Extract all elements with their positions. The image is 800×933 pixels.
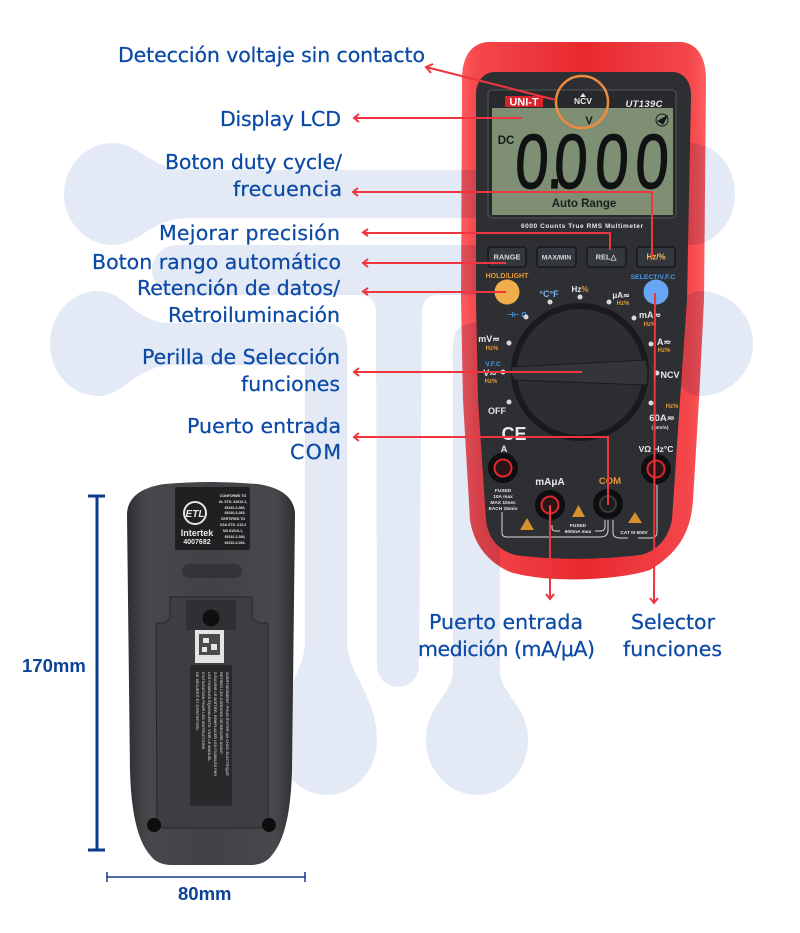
fuse notes and safety lines: CAT III 600V — [620, 530, 648, 536]
certification sticker: CSA STD. C22.2 — [220, 523, 246, 527]
label: data hold: Retroiluminación — [168, 303, 340, 327]
grip slot — [182, 564, 242, 578]
LCD auto icon — [656, 114, 668, 126]
A jack: A — [501, 444, 508, 454]
LCD DC indicator: DC — [498, 135, 514, 147]
dial scale labels: °C°F — [539, 289, 559, 299]
QR label — [195, 630, 224, 663]
dial scale labels: A≂ — [657, 337, 671, 347]
RANGE button — [488, 247, 526, 267]
label: selector knob: Perilla de Selección — [142, 345, 340, 369]
certification sticker: UL STD. 61010-1, — [219, 500, 247, 504]
label: duty cycle: frecuencia — [233, 177, 342, 201]
label: selector knob: funciones — [241, 372, 340, 396]
dial scale labels: ⊣⊢ Ω — [507, 311, 527, 319]
certification sticker: NO.61010-1, — [223, 529, 243, 533]
A jack — [488, 444, 518, 483]
label: COM port: Puerto entrada — [187, 414, 341, 438]
input jacks — [488, 444, 673, 520]
label: function selector: funciones — [623, 637, 722, 661]
hold light button: HOLD/LIGHT — [486, 273, 529, 280]
LCD V indicator: V — [585, 115, 593, 127]
arrow: REL button — [363, 229, 610, 250]
warning label — [190, 665, 232, 806]
V ohm jack — [639, 444, 673, 484]
dial scale labels: mA≂ — [639, 310, 661, 320]
dial scale labels: NCV — [660, 370, 680, 380]
model caption: 6000 Counts True RMS Multimeter — [521, 223, 643, 230]
UNI-T badge: UNI-T — [509, 96, 539, 108]
dial scale labels: μA≂ — [612, 291, 630, 300]
arrow: selector — [650, 293, 658, 603]
dial scale labels: Hz% — [485, 379, 498, 385]
REL button: REL△ — [596, 252, 618, 262]
label: measurement port — [418, 610, 595, 661]
certification sticker: 61010-2-030, — [225, 506, 245, 510]
label: data hold — [137, 276, 340, 327]
dimension: height — [88, 496, 105, 850]
V ohm jack: VΩ Hz°C — [639, 444, 673, 454]
dial scale labels: Hz% — [644, 322, 657, 328]
LCD frame — [488, 90, 676, 218]
mA uA jack — [535, 477, 565, 520]
label: function selector — [623, 610, 722, 661]
MAX/MIN button: MAX/MIN — [542, 254, 571, 262]
dimension: width — [107, 872, 305, 882]
label: measurement port: Puerto entrada — [429, 610, 583, 634]
LCD auto range text: Auto Range — [552, 198, 616, 210]
battery door — [156, 597, 268, 828]
arrow: range button — [363, 259, 506, 267]
select button: SELECT/V.F.C — [631, 274, 675, 281]
label: data hold: Retención de datos/ — [137, 276, 340, 300]
certification sticker: CERTIFIED TO — [221, 517, 245, 521]
dial scale labels: Hz% — [486, 346, 499, 352]
warning label: LES FUSIBLES ÉQUIVALENTS. VOIR LE MANUEL — [207, 672, 212, 762]
fuse notes and safety lines: FUSED — [495, 488, 512, 494]
label: selector knob — [142, 345, 340, 396]
select button — [631, 274, 675, 304]
MAX/MIN button — [537, 247, 576, 267]
COM jack — [593, 476, 623, 519]
dial scale labels: Hz% — [658, 348, 671, 354]
arrow: NCV — [426, 64, 556, 100]
height label: 170mm — [22, 655, 86, 676]
NCV sensor mark: NCV — [574, 96, 592, 106]
width label: 80mm — [178, 883, 231, 904]
dial scale labels: V.F.C — [485, 361, 501, 368]
dial scale labels: Hz% — [617, 301, 630, 307]
back shell — [127, 482, 295, 865]
warning label: D'OUVRIR LE BOÎTIER. REMPLACER LES FUSIBLES PAR — [213, 672, 218, 776]
arrow: duty cycle button — [353, 188, 652, 258]
label: duty cycle — [165, 150, 342, 201]
screw holes — [147, 818, 276, 832]
label: function selector: Selector — [631, 610, 716, 634]
fuse notes and safety lines: MAX 10sec — [490, 500, 516, 506]
LCD screen — [492, 108, 673, 215]
label: display: Display LCD — [220, 107, 341, 131]
arrow: COM port — [354, 433, 608, 505]
dial scale labels: CE — [501, 424, 527, 444]
multimeter front view — [461, 42, 706, 579]
NCV highlight circle — [556, 76, 608, 128]
dial scale labels: OFF — [488, 406, 506, 416]
certification sticker: ETL — [186, 509, 204, 520]
arrow: mA port — [546, 505, 554, 599]
fuse notes and safety lines: 600mA max — [565, 529, 592, 535]
REL button — [587, 247, 626, 267]
certification sticker: CONFORMS TO — [220, 494, 246, 498]
arrow: display — [354, 114, 522, 122]
red rubber case — [461, 42, 706, 579]
RANGE button: RANGE — [493, 252, 521, 262]
label: auto range: Boton rango automático — [92, 250, 341, 274]
certification sticker: Intertek — [181, 528, 214, 538]
dial scale labels: V≂ — [483, 368, 497, 378]
door latch and hole — [186, 600, 236, 630]
label: NCV: Detección voltaje sin contacto — [118, 43, 425, 67]
COM jack: COM — [599, 476, 621, 487]
fuse notes and safety lines — [489, 485, 657, 538]
dial scale labels — [478, 285, 680, 444]
dial scale labels: mV≂ — [478, 334, 500, 344]
hold light button — [486, 273, 529, 304]
rotary selector knob — [511, 303, 649, 441]
label: COM port — [187, 414, 341, 464]
certification sticker: 61010-2-033. — [225, 541, 245, 545]
label: duty cycle: Boton duty cycle/ — [165, 150, 342, 174]
fuse notes and safety lines: 10A max — [493, 494, 513, 500]
dark meter body — [476, 72, 691, 559]
label: precision: Mejorar precisión — [159, 221, 340, 245]
certification sticker: 4007682 — [183, 539, 211, 546]
LCD reading: 0.000 — [513, 118, 671, 205]
dial scale labels: Hz% — [666, 404, 679, 410]
arrow: hold button — [363, 288, 506, 295]
dial scale labels: (1mV/A) — [651, 425, 669, 430]
fuse notes and safety lines: FUSED — [570, 523, 587, 529]
model name: UT139C — [626, 99, 663, 110]
fuse notes and safety lines: EACH 15min — [489, 506, 517, 512]
background watermark logo — [50, 143, 753, 795]
arrow: rotary knob — [354, 368, 582, 376]
warning label: AVERTISSEMENT: POUR ÉVITER UN CHOC ÉLECTRIQUE — [225, 672, 230, 776]
mA uA jack: mAμA — [535, 477, 565, 488]
warning label: DE SÉCURITÉ ET D'ENTRETIEN. — [195, 672, 200, 731]
multimeter back view — [127, 482, 295, 865]
certification sticker — [175, 487, 250, 550]
certification sticker: 61010-2-030, — [225, 535, 245, 539]
warning label: RETIREZ LES CORDONS DE MESURE AVANT — [219, 672, 223, 755]
Hz button: Hz/% — [646, 252, 666, 262]
watermark tint on red case — [461, 143, 706, 566]
dial scale labels: 60A≂ — [649, 413, 675, 424]
dial scale labels: Hz% — [572, 285, 588, 294]
certification sticker: 61010-2-033. — [225, 511, 245, 515]
knob pointer — [511, 360, 648, 385]
Hz button — [637, 247, 675, 267]
button row — [488, 247, 675, 267]
label: measurement port: medición (mA/μA) — [418, 637, 595, 661]
warning label: D'UTILISATION POUR LES INSTRUCTIONS — [201, 672, 205, 750]
label: COM port: COM — [290, 440, 341, 464]
